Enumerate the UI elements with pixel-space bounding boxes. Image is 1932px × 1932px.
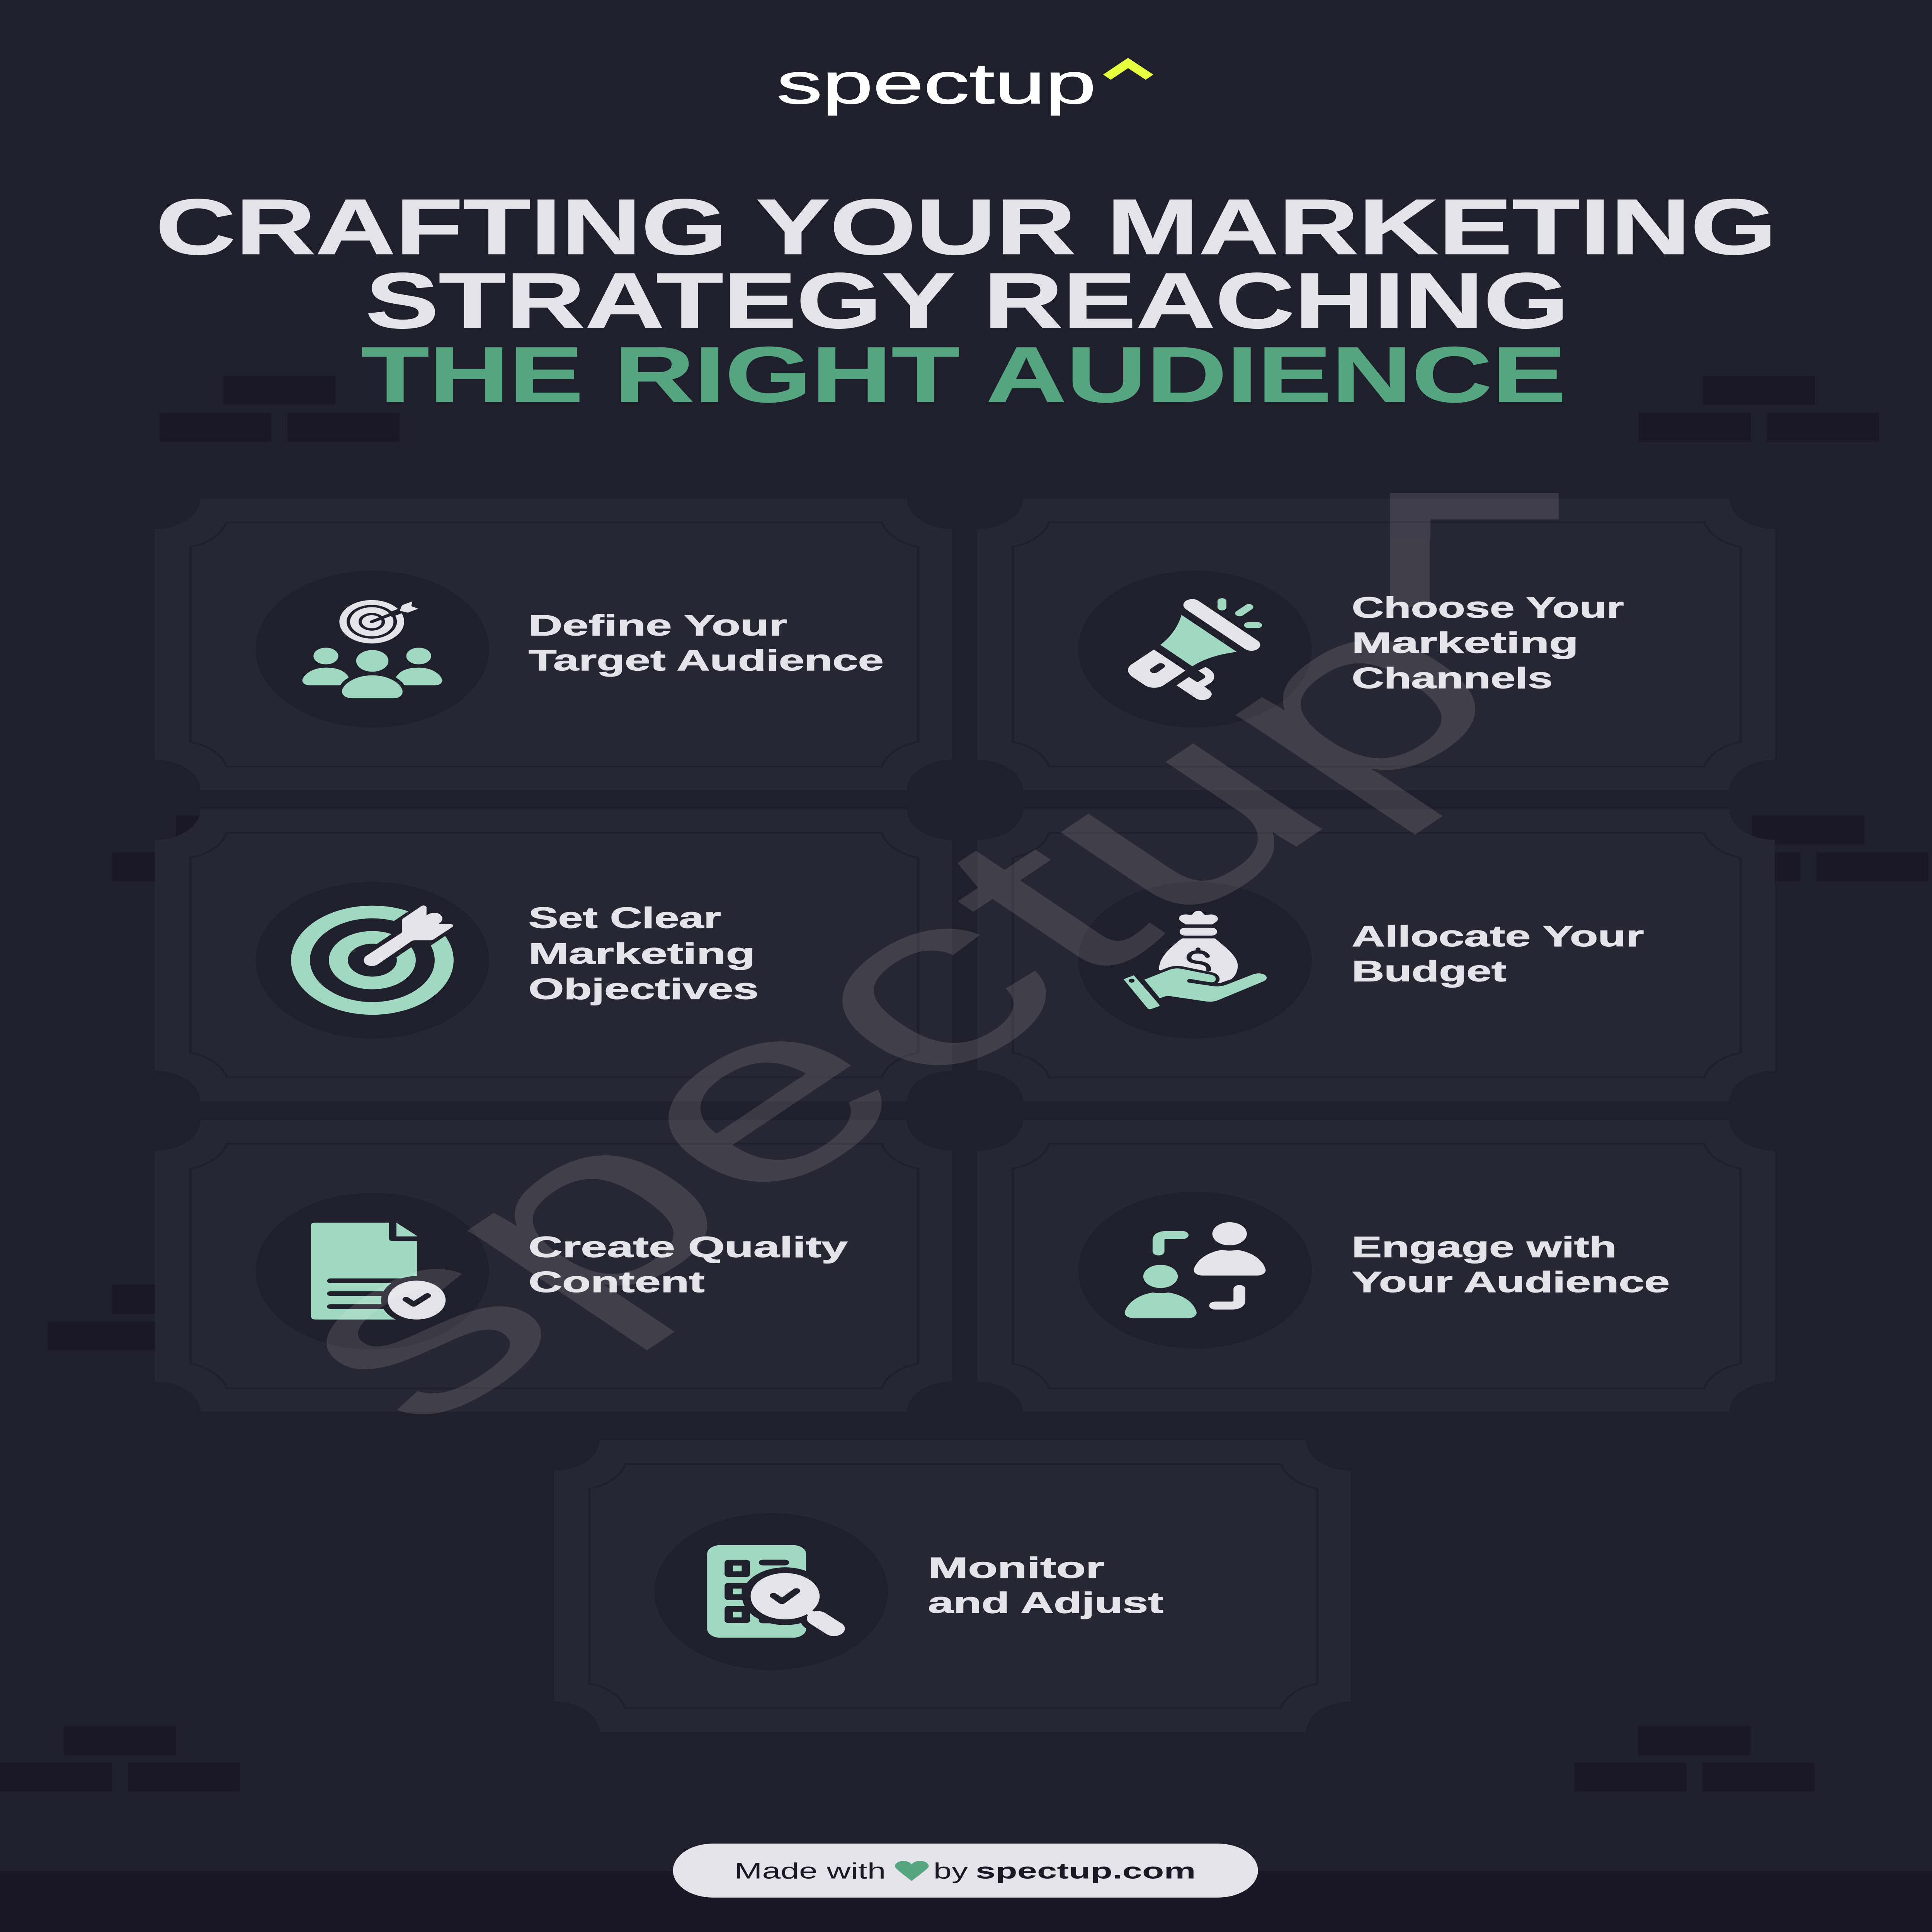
- icon: two people exchange: [1125, 1222, 1266, 1318]
- icon circle: [1078, 1192, 1312, 1349]
- badge pill: [673, 1844, 1258, 1898]
- card frame: [978, 810, 1775, 1101]
- label: Set Clear: [529, 902, 721, 934]
- label: Budget: [1352, 955, 1507, 988]
- label: [1352, 920, 1644, 988]
- background bricks: [0, 376, 1929, 1792]
- footer badge: [673, 1844, 1258, 1898]
- label: [529, 609, 884, 677]
- title: [156, 183, 1777, 418]
- panel: choose your marketing channels: [978, 498, 1775, 790]
- icon: heart: [895, 1861, 929, 1881]
- label: [1352, 592, 1624, 695]
- label: Choose Your: [1352, 592, 1624, 624]
- icon circle: [1078, 571, 1312, 728]
- icon circle: [255, 882, 489, 1039]
- icon: document with check: [311, 1223, 453, 1324]
- panel: create quality content: [155, 1120, 952, 1412]
- watermark: [198, 493, 1571, 1472]
- label: Allocate Your: [1352, 920, 1644, 953]
- card frame: [155, 810, 952, 1101]
- icon: bullseye with dart: [301, 905, 453, 1009]
- card frame: [155, 498, 952, 790]
- label: Monitor: [928, 1552, 1104, 1584]
- panel: set clear marketing objectives: [155, 810, 952, 1101]
- icon circle: [655, 1513, 888, 1670]
- label: Marketing: [529, 937, 755, 970]
- logo caret: [1107, 63, 1150, 77]
- label: [529, 1231, 848, 1299]
- panel: allocate your budget: [978, 810, 1775, 1101]
- panel: monitor and adjust: [554, 1440, 1351, 1732]
- logo wordmark: spectup: [777, 51, 1096, 116]
- label: Channels: [1352, 662, 1553, 695]
- label: [928, 1552, 1163, 1619]
- label: Target Audience: [529, 644, 884, 677]
- label: Marketing: [1352, 627, 1578, 659]
- icon: megaphone: [1128, 601, 1258, 700]
- card frame: [978, 498, 1775, 790]
- label: and Adjust: [928, 1587, 1163, 1619]
- card frame: [554, 1440, 1351, 1732]
- card frame: [978, 1120, 1775, 1412]
- icon: target and audience: [302, 602, 442, 698]
- label: Your Audience: [1352, 1266, 1670, 1299]
- label: [529, 902, 759, 1005]
- card frame: [155, 1120, 952, 1412]
- made with text: Made with: [735, 1859, 886, 1883]
- title: CRAFTING YOUR MARKETING: [156, 183, 1777, 271]
- footer band: [0, 1871, 1932, 1932]
- icon: checklist with magnifier: [707, 1545, 834, 1638]
- label: [1352, 1231, 1670, 1299]
- panel: engage with your audience: [978, 1120, 1775, 1412]
- icon circle: [255, 571, 489, 728]
- icon: money bag on hand: [1124, 911, 1267, 1009]
- label: Engage with: [1352, 1231, 1617, 1264]
- label: Define Your: [529, 609, 787, 642]
- label: Create Quality: [529, 1231, 848, 1264]
- panel: define your target audience: [155, 498, 952, 790]
- icon circle: [255, 1193, 489, 1350]
- title: STRATEGY REACHING: [366, 257, 1569, 345]
- icon circle: [1078, 882, 1312, 1039]
- site name: spectup.com: [976, 1859, 1196, 1883]
- title: THE RIGHT AUDIENCE: [361, 330, 1566, 418]
- by text: by: [934, 1859, 968, 1883]
- logo: [777, 51, 1150, 116]
- watermark: spectup: [198, 550, 1571, 1472]
- label: Objectives: [529, 973, 759, 1005]
- label: Content: [529, 1266, 705, 1299]
